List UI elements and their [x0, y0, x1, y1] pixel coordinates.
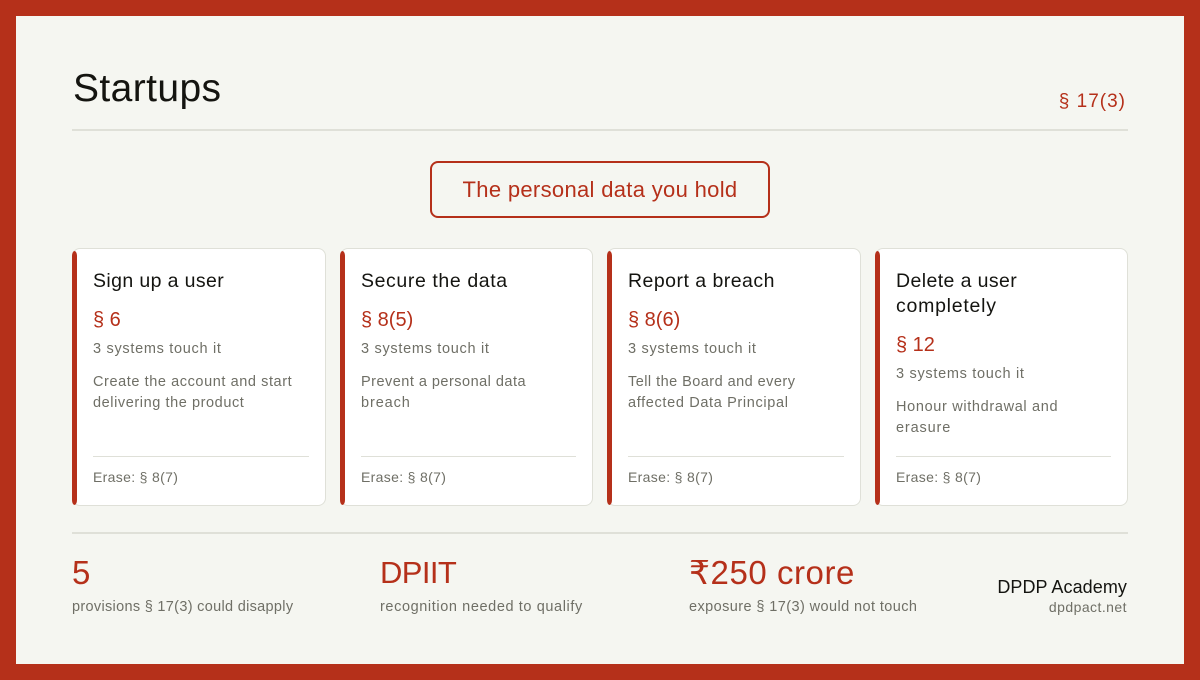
description: [361, 374, 526, 411]
brand name: DPDP Academy: [997, 577, 1127, 597]
section: § 8(6): [628, 309, 680, 331]
erase reference: Erase: § 8(7): [93, 469, 178, 485]
description: Tell the Board and every: [628, 374, 795, 390]
stat: 5 provisions: [72, 554, 293, 615]
stat: DPIIT: [380, 555, 583, 615]
systems count: 3 systems touch it: [361, 341, 490, 357]
description: [896, 399, 1058, 436]
brand: [997, 577, 1127, 615]
title: Startups: [73, 67, 221, 110]
card: report a breach: [607, 248, 861, 506]
erase reference: Erase: § 8(7): [361, 469, 446, 485]
section: § 6: [93, 309, 121, 331]
systems count: 3 systems touch it: [93, 341, 222, 357]
card heading: Secure the data: [361, 270, 508, 292]
description: breach: [361, 395, 411, 411]
card heading: completely: [896, 295, 997, 317]
card heading: [896, 270, 1017, 317]
card: delete a user completely: [875, 248, 1128, 506]
stat: 250 crore: [689, 554, 917, 615]
description: Honour withdrawal and: [896, 399, 1058, 415]
value: ₹250 crore: [689, 554, 855, 591]
description: Create the account and start: [93, 374, 292, 390]
description: affected Data Principal: [628, 395, 789, 411]
section: § 8(5): [361, 309, 413, 331]
value: 5: [72, 554, 90, 591]
value: DPIIT: [380, 555, 456, 590]
banner: the personal data you hold: The personal data you hold: [463, 177, 737, 202]
caption: provisions § 17(3) could disapply: [72, 599, 293, 615]
erase reference: Erase: § 8(7): [628, 469, 713, 485]
description: [93, 374, 292, 411]
card heading: Sign up a user: [93, 270, 224, 292]
section reference: § 17(3): [1059, 91, 1126, 112]
description: erasure: [896, 420, 951, 436]
description: [628, 374, 795, 411]
section: § 12: [896, 334, 935, 356]
card heading: Delete a user: [896, 270, 1017, 292]
caption: recognition needed to qualify: [380, 599, 583, 615]
erase reference: Erase: § 8(7): [896, 469, 981, 485]
card: secure the data: [340, 248, 593, 506]
card: sign up a user: [72, 248, 326, 506]
banner: the personal data you hold: [430, 161, 770, 218]
caption: exposure § 17(3) would not touch: [689, 599, 917, 615]
brand url: dpdpact.net: [1049, 599, 1127, 615]
systems count: 3 systems touch it: [628, 341, 757, 357]
description: delivering the product: [93, 395, 244, 411]
systems count: 3 systems touch it: [896, 366, 1025, 382]
description: Prevent a personal data: [361, 374, 526, 390]
card heading: Report a breach: [628, 270, 775, 292]
